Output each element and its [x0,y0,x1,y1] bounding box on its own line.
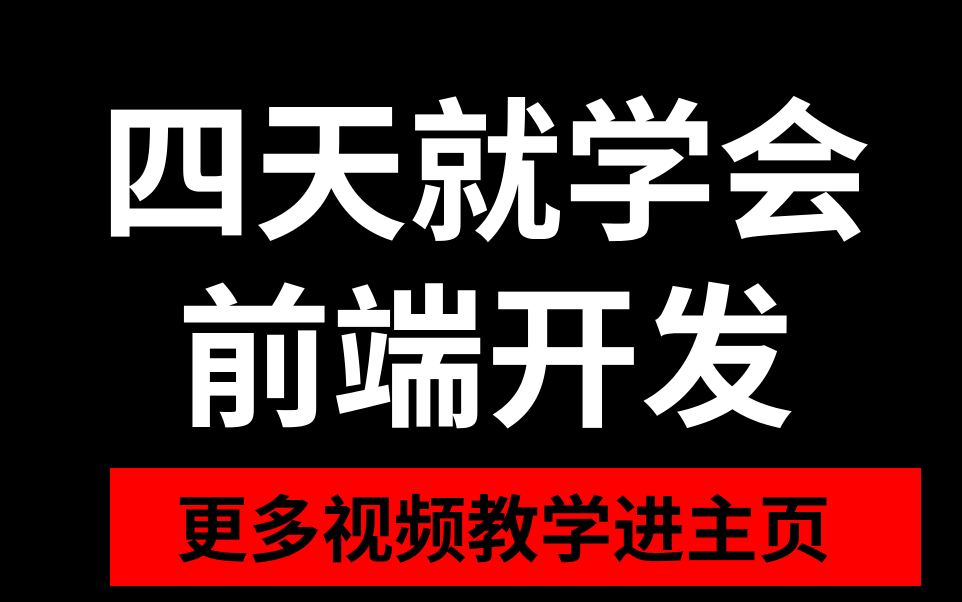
title line 1: 四天就学会 [99,88,872,261]
red banner [110,468,921,586]
title line 2: 前端开发 [177,274,795,447]
banner text: 更多视频教学进主页 [176,491,831,572]
